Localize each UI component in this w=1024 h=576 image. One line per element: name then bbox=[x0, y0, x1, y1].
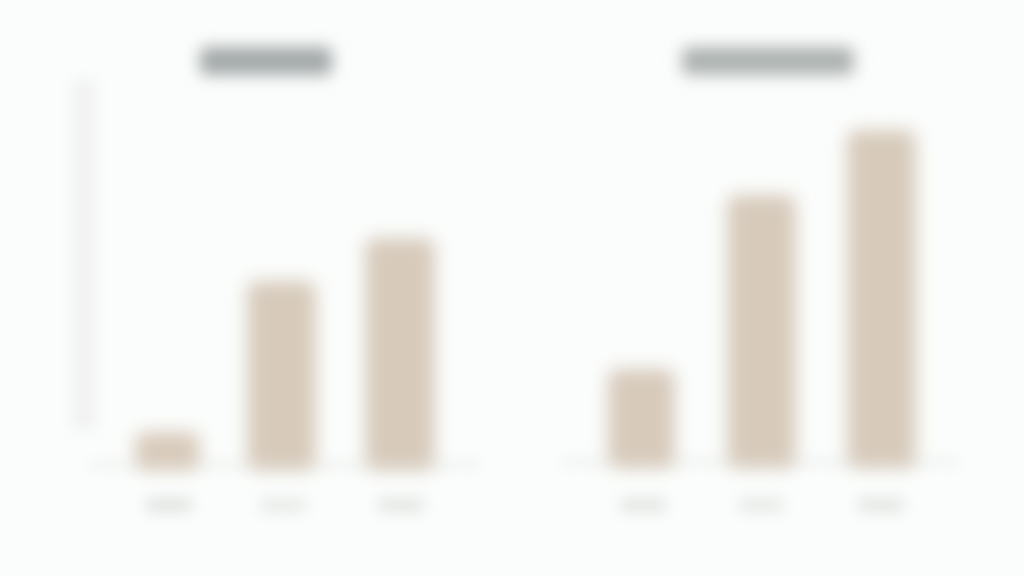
left chart title (illegible in reference) bbox=[200, 47, 332, 75]
panel: right chart bbox=[560, 47, 960, 513]
right x label 3 (illegible in reference) bbox=[858, 497, 904, 513]
panel: left chart bbox=[72, 47, 480, 513]
right x label 2 (illegible in reference) bbox=[738, 497, 784, 513]
left bar 3 bbox=[365, 238, 435, 470]
left baseline bbox=[90, 462, 480, 468]
right bar 3 bbox=[847, 130, 916, 468]
left x label 2 (illegible in reference) bbox=[260, 497, 306, 513]
right chart title (illegible in reference) bbox=[682, 47, 854, 75]
left y axis labels (illegible in reference) bbox=[72, 80, 96, 430]
left x label 3 (illegible in reference) bbox=[378, 497, 424, 513]
left x label 1 (illegible in reference) bbox=[146, 497, 192, 513]
right bar 1 bbox=[608, 369, 675, 468]
left bar 1 bbox=[135, 432, 200, 470]
left bar 2 bbox=[247, 281, 316, 470]
right baseline bbox=[560, 459, 960, 465]
right bar 2 bbox=[727, 195, 796, 468]
right x label 1 (illegible in reference) bbox=[620, 497, 666, 513]
